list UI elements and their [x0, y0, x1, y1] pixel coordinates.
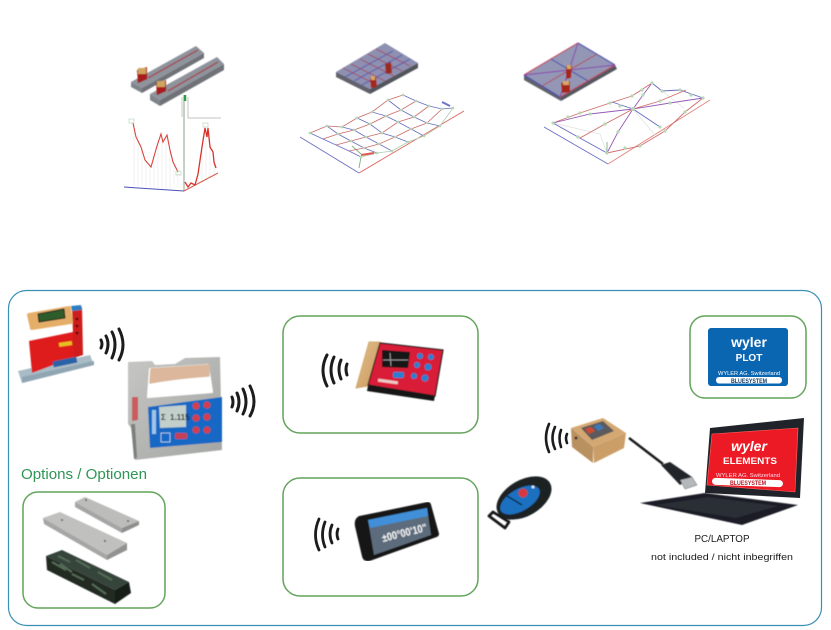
icon: wireless signal from level — [101, 329, 123, 360]
caption: PC/LAPTOP note: not included / nicht inbegriffen — [651, 552, 793, 563]
heading: options: Options / Optionen — [21, 467, 147, 483]
panel: smartphone box — [283, 478, 478, 596]
icon: Bluetooth key fob — [489, 467, 559, 529]
icon: wireless signal to receiver — [546, 424, 567, 452]
icon: wireless signal from inclinometer — [232, 386, 254, 416]
icon: laptop with wyler ELEMENTS — [640, 418, 804, 525]
chart: straightness profile — [124, 95, 221, 191]
icon: wireless signal to smartphone — [316, 519, 338, 550]
icon: laptop with wyler ELEMENTS: ELEMENTS — [723, 456, 777, 466]
panel: surface grid measurement — [300, 43, 464, 173]
caption: PC/LAPTOP note — [651, 534, 793, 563]
panel: straightness measurement on two beams — [124, 46, 224, 191]
icon: wyler PLOT software logo: WYLER AG. Switzerland — [718, 371, 780, 377]
icon: measuring bases — [43, 497, 139, 560]
icon: surface plate with grid — [336, 43, 418, 94]
icon: smartphone with inclination app: ±00°00'10" — [381, 522, 428, 545]
icon: wyler PLOT software logo — [708, 328, 788, 386]
caption: PC/LAPTOP note: PC/LAPTOP — [694, 534, 750, 545]
icon: digital level BlueLEVEL — [18, 305, 94, 383]
icon: electronic inclinometer: Σ — [161, 413, 166, 422]
icon: laptop with wyler ELEMENTS: wyler — [731, 438, 768, 454]
panel: software wylerPLOT box — [690, 316, 806, 398]
icon: laptop with wyler ELEMENTS: WYLER AG. Switzerland — [716, 473, 780, 479]
icon: rear beam — [150, 57, 224, 106]
panel: outer system frame — [8, 290, 822, 626]
icon: smartphone with inclination app — [358, 505, 436, 558]
icon: granite block — [46, 550, 131, 604]
icon: USB cable and plug — [629, 438, 697, 489]
panel: options box — [23, 492, 165, 608]
panel: Union Jack flatness measurement — [524, 43, 710, 164]
chart: grid deviation mesh — [300, 94, 464, 173]
icon: wyler PLOT software logo: BLUESYSTEM — [731, 379, 767, 385]
icon: electronic inclinometer — [128, 357, 222, 460]
chart: Union Jack deviation mesh — [544, 81, 710, 164]
icon: wireless signal to remote display — [323, 355, 347, 386]
icon: laptop with wyler ELEMENTS: BLUESYSTEM — [730, 481, 766, 487]
icon: wyler PLOT software logo: PLOT — [736, 353, 762, 364]
icon: front beam — [131, 46, 204, 93]
icon: USB wireless receiver box — [571, 418, 626, 463]
icon: BlueMETER remote display — [356, 342, 443, 401]
icon: level sensors — [137, 67, 166, 95]
icon: electronic inclinometer: 1.115 — [170, 413, 190, 422]
icon: plate with diagonal lines — [524, 43, 617, 101]
panel: remote display box — [283, 316, 478, 433]
icon: wyler PLOT software logo: wyler — [730, 334, 767, 350]
